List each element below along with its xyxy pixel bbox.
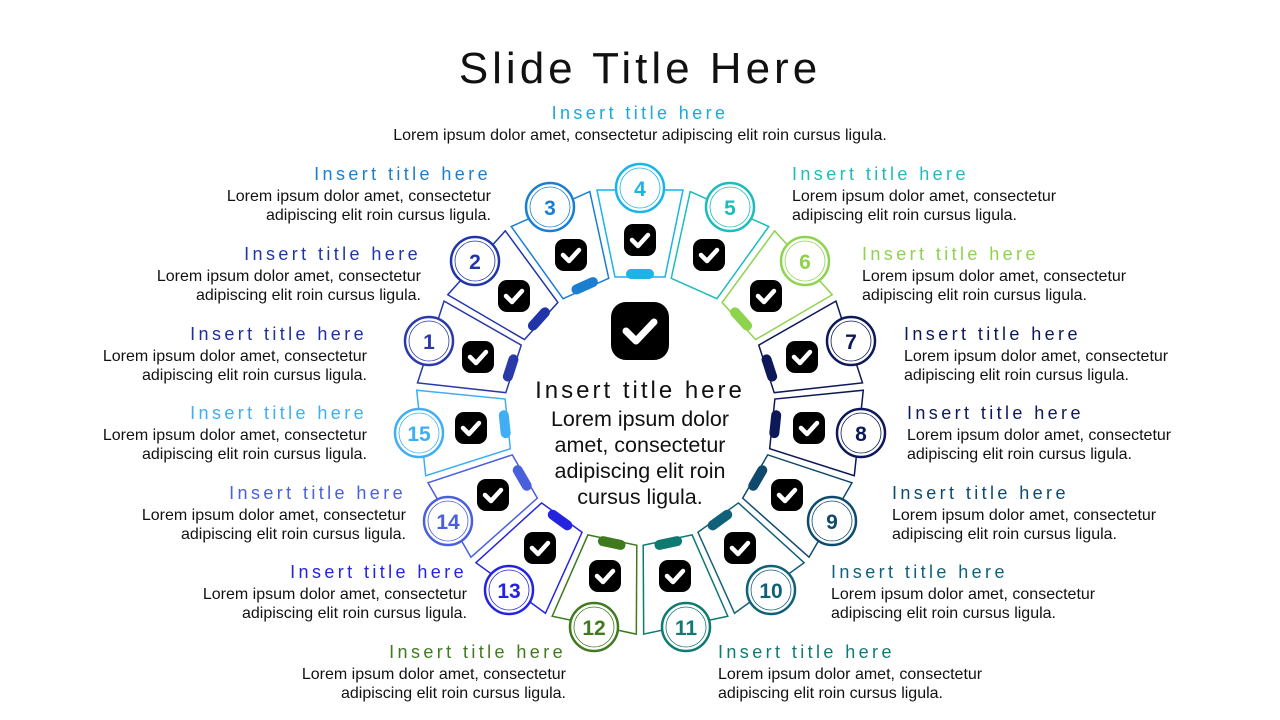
item 13 — [476, 491, 598, 614]
text: item 2: Insert title here — [244, 244, 421, 264]
text: item 1 — [103, 324, 367, 384]
text: item 14: adipiscing elit roin cursus ligula. — [181, 526, 406, 543]
text: item 3: adipiscing elit roin cursus ligula. — [266, 207, 491, 224]
text: item 3 — [227, 164, 491, 224]
icon: center check — [611, 302, 669, 360]
text: item 4: Lorem ipsum dolor amet, consectetur adipiscing elit roin cursus ligula. — [393, 127, 887, 144]
text: item 11 — [718, 642, 982, 702]
item 9: 9 — [826, 511, 838, 534]
text: item 13: Lorem ipsum dolor amet, consectetur — [203, 586, 467, 603]
text: item 1: Insert title here — [190, 324, 367, 344]
item 7 — [751, 301, 875, 410]
item 12 — [552, 529, 655, 651]
item 2: 2 — [469, 251, 481, 274]
text: item 2: Lorem ipsum dolor amet, consectetur — [157, 268, 421, 285]
text: item 3: Lorem ipsum dolor amet, consectetur — [227, 188, 491, 205]
item 1: 1 — [423, 331, 435, 354]
text: item 1: adipiscing elit roin cursus ligula. — [142, 367, 367, 384]
text: item 15: Lorem ipsum dolor amet, consectetur — [103, 427, 367, 444]
center text: cursus ligula. — [577, 485, 703, 509]
text: item 10: Lorem ipsum dolor amet, consectetur — [831, 586, 1095, 603]
item 10 — [682, 491, 804, 614]
text: item 12: Insert title here — [389, 642, 566, 662]
text: item 15: Insert title here — [190, 403, 367, 423]
text: item 5: adipiscing elit roin cursus ligula. — [792, 207, 1017, 224]
item 12: 12 — [582, 617, 606, 640]
text: item 8: Insert title here — [907, 403, 1084, 423]
text: item 15 — [103, 403, 367, 463]
text: item 10: Insert title here — [831, 562, 1008, 582]
item 6 — [709, 231, 832, 354]
text: item 7: Insert title here — [904, 324, 1081, 344]
text: item 4: Insert title here — [552, 103, 728, 123]
text: item 13 — [203, 562, 467, 622]
text: item 6 — [862, 244, 1126, 304]
slide title: Slide Title Here — [459, 44, 821, 93]
text: item 4 — [393, 103, 887, 144]
text: item 10: adipiscing elit roin cursus ligula. — [831, 605, 1056, 622]
text: item 8: Lorem ipsum dolor amet, consectetur — [907, 427, 1171, 444]
text: item 7: adipiscing elit roin cursus ligula. — [904, 367, 1129, 384]
item 9 — [732, 438, 856, 557]
text: item 8 — [907, 403, 1171, 463]
item 15 — [395, 381, 514, 476]
text: item 5 — [792, 164, 1056, 224]
center text: amet, consectetur — [555, 433, 725, 457]
item 6: 6 — [799, 251, 811, 274]
item 11 — [625, 529, 728, 651]
text: item 9 — [892, 483, 1156, 543]
item 15: 15 — [407, 423, 431, 446]
center text: adipiscing elit roin — [555, 459, 725, 483]
text: item 10 — [831, 562, 1095, 622]
text: item 6: Lorem ipsum dolor amet, consectetur — [862, 268, 1126, 285]
item 5: 5 — [724, 197, 736, 220]
center text: Lorem ipsum dolor — [551, 407, 729, 431]
item 8 — [766, 381, 885, 476]
text: item 5: Insert title here — [792, 164, 969, 184]
center text — [535, 377, 745, 509]
text: item 12 — [302, 642, 566, 702]
text: item 13: Insert title here — [290, 562, 467, 582]
item 5 — [655, 183, 769, 306]
item 7: 7 — [845, 331, 857, 354]
text: item 11: Lorem ipsum dolor amet, consectetur — [718, 666, 982, 683]
item 3 — [511, 183, 626, 308]
item 2 — [448, 231, 571, 354]
text: item 14: Lorem ipsum dolor amet, consectetur — [142, 507, 406, 524]
text: item 14 — [142, 483, 406, 543]
item 4 — [597, 164, 683, 279]
text: item 13: adipiscing elit roin cursus ligula. — [242, 605, 467, 622]
item 1 — [405, 301, 529, 410]
text: item 9: Lorem ipsum dolor amet, consectetur — [892, 507, 1156, 524]
text: item 3: Insert title here — [314, 164, 491, 184]
item 11: 11 — [675, 617, 697, 640]
text: item 1: Lorem ipsum dolor amet, consectetur — [103, 348, 367, 365]
text: item 8: adipiscing elit roin cursus ligula. — [907, 446, 1132, 463]
text: item 9: Insert title here — [892, 483, 1069, 503]
text: item 6: adipiscing elit roin cursus ligula. — [862, 287, 1087, 304]
item 13: 13 — [497, 580, 521, 603]
item 14: 14 — [436, 511, 460, 534]
center text: Insert title here — [535, 377, 745, 404]
text: item 15: adipiscing elit roin cursus ligula. — [142, 446, 367, 463]
text: item 12: adipiscing elit roin cursus ligula. — [341, 685, 566, 702]
text: item 7 — [904, 324, 1168, 384]
text: item 5: Lorem ipsum dolor amet, consectetur — [792, 188, 1056, 205]
text: item 12: Lorem ipsum dolor amet, consectetur — [302, 666, 566, 683]
text: item 2 — [157, 244, 421, 304]
item 10: 10 — [759, 580, 783, 603]
item 8: 8 — [855, 423, 867, 446]
text: item 14: Insert title here — [229, 483, 406, 503]
text: item 11: adipiscing elit roin cursus ligula. — [718, 685, 943, 702]
item 4: 4 — [634, 178, 646, 201]
item 3: 3 — [544, 197, 556, 220]
text: item 9: adipiscing elit roin cursus ligula. — [892, 526, 1117, 543]
text: item 2: adipiscing elit roin cursus ligula. — [196, 287, 421, 304]
text: item 6: Insert title here — [862, 244, 1039, 264]
item 14 — [424, 438, 548, 557]
text: item 11: Insert title here — [718, 642, 895, 662]
text: item 7: Lorem ipsum dolor amet, consectetur — [904, 348, 1168, 365]
